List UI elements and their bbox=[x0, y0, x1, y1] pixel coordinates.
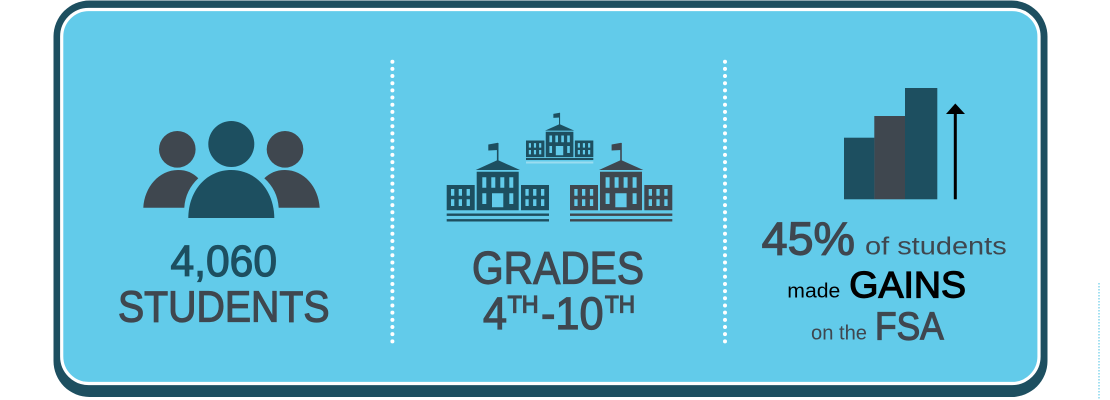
text: grades 4th to 10th: GRADES bbox=[472, 242, 644, 293]
text: grades 4th to 10th bbox=[472, 242, 644, 339]
chart: rising bars with up arrow bbox=[844, 88, 965, 199]
icon: group of three students bbox=[143, 121, 320, 218]
text: 45% of students made gains on the FSA: GAINS bbox=[849, 264, 966, 306]
decorative: faint dotted line at right edge bbox=[1098, 283, 1100, 400]
text: 45% of students made gains on the FSA: 45% bbox=[762, 212, 855, 264]
text: grades 4th to 10th: TH bbox=[508, 291, 539, 318]
text: 45% of students made gains on the FSA: of students bbox=[865, 232, 1007, 260]
text: 4,060 students: STUDENTS bbox=[118, 284, 330, 332]
text: 45% of students made gains on the FSA: made bbox=[787, 280, 840, 302]
text: 4,060 students bbox=[118, 237, 330, 332]
text: 45% of students made gains on the FSA: on the bbox=[811, 322, 867, 344]
icon: three school buildings bbox=[447, 113, 672, 222]
divider: left dotted line bbox=[390, 62, 394, 342]
text: grades 4th to 10th: -10 bbox=[541, 288, 604, 339]
text: 45% of students made gains on the FSA: FSA bbox=[875, 305, 944, 348]
text: grades 4th to 10th: 4 bbox=[483, 288, 507, 339]
text: 45% of students made gains on the FSA bbox=[762, 212, 1007, 348]
text: 4,060 students: 4,060 bbox=[170, 237, 277, 286]
divider: right dotted line bbox=[723, 62, 727, 342]
text: grades 4th to 10th: TH bbox=[605, 291, 635, 318]
